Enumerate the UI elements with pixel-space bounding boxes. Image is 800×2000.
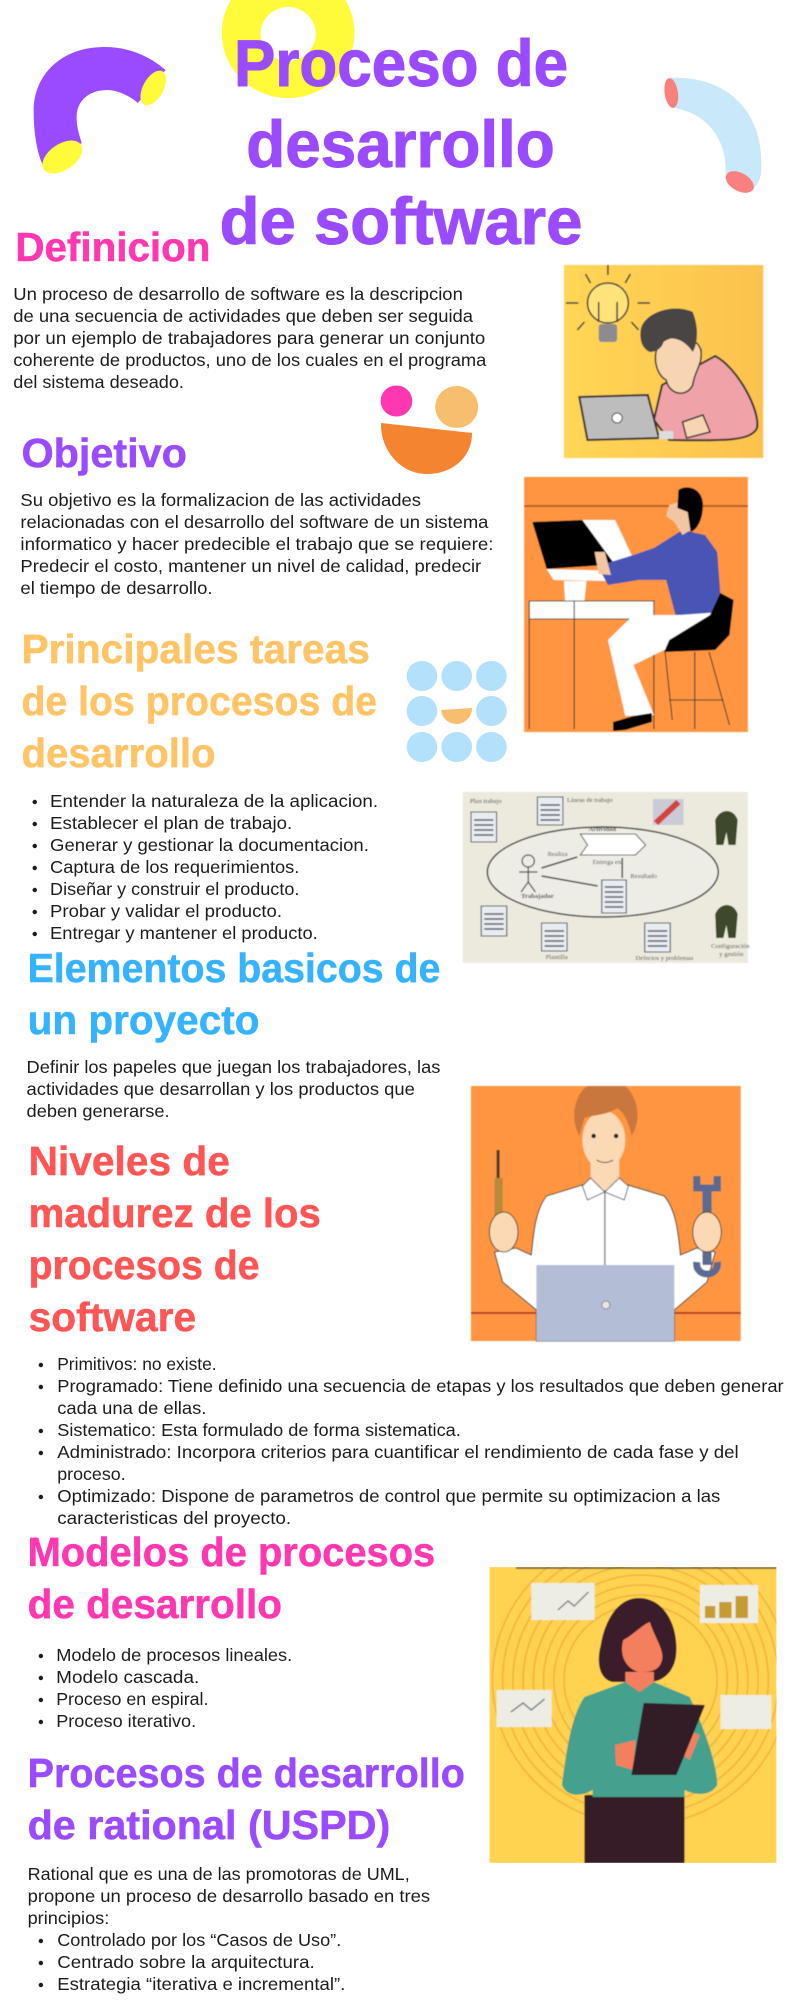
decoration: yellow ring xyxy=(222,0,355,98)
text block: definicion: de una secuencia de actividades que deben ser seguida xyxy=(13,306,474,326)
illustration: man at drafting desk xyxy=(524,477,748,732)
text block: elementos: actividades que desarrollan y los productos que xyxy=(27,1079,415,1099)
heading: Elementos basicos: un proyecto xyxy=(28,996,260,1043)
illustration: woman with tablet xyxy=(489,1567,776,1863)
list: niveles de madurez: caracteristicas del proyecto. xyxy=(57,1508,291,1528)
text block: objetivo xyxy=(20,490,493,598)
list: principales tareas: Generar y gestionar la documentacion. xyxy=(50,835,369,855)
title xyxy=(220,28,582,259)
heading: Modelos de procesos: Modelos de procesos xyxy=(28,1528,435,1575)
diagram: software process elements: Realiza xyxy=(548,851,568,858)
list: principales tareas: Entregar y mantener el producto. xyxy=(50,923,318,943)
diagram: software process elements: Actividad xyxy=(589,826,616,833)
heading: Niveles de madurez xyxy=(29,1137,321,1340)
list: modelos: Proceso en espiral. xyxy=(56,1689,208,1709)
list: principales tareas: Diseñar y construir el producto. xyxy=(50,879,299,899)
list: principales tareas: Captura de los requerimientos. xyxy=(50,857,299,877)
heading: Niveles de madurez: Niveles de xyxy=(29,1137,230,1184)
list: modelos: Proceso iterativo. xyxy=(56,1711,196,1731)
list: principales tareas xyxy=(32,791,378,943)
text block: rational xyxy=(28,1864,430,1928)
heading: Objetivo: Objetivo xyxy=(21,429,187,476)
text block: elementos: Definir los papeles que juegan los trabajadores, las xyxy=(27,1057,440,1077)
diagram: software process elements: Plantilla xyxy=(546,954,568,961)
heading: Elementos basicos xyxy=(28,944,440,1043)
heading: Elementos basicos: Elementos basicos de xyxy=(28,944,440,991)
heading: Niveles de madurez: madurez de los xyxy=(29,1189,321,1236)
list: principios xyxy=(39,1930,345,1994)
heading: Procesos de desarrollo de rational: de rational (USPD) xyxy=(28,1801,390,1848)
list: modelos xyxy=(39,1645,292,1731)
text block: rational: Rational que es una de las promotoras de UML, xyxy=(28,1864,410,1884)
list: niveles de madurez: cada una de ellas. xyxy=(57,1398,206,1418)
list: niveles de madurez: Programado: Tiene definido una secuencia de etapas y los resultados que deben generar xyxy=(57,1376,784,1396)
text block: objetivo: el tiempo de desarrollo. xyxy=(20,578,213,598)
text block: definicion: coherente de productos, uno de los cuales en el programa xyxy=(13,350,487,370)
diagram: software process elements: Entrega en xyxy=(593,859,622,866)
heading: Principales tareas: desarrollo xyxy=(21,729,216,776)
text block: objetivo: informatico y hacer predecible el trabajo que se requiere: xyxy=(20,534,493,554)
text block: elementos xyxy=(27,1057,440,1121)
list: modelos: Modelo cascada. xyxy=(56,1667,199,1687)
heading: Niveles de madurez: software xyxy=(29,1293,196,1340)
text block: definicion: del sistema deseado. xyxy=(13,372,184,392)
list: principios: Estrategia “iterativa e incremental”. xyxy=(57,1974,345,1994)
list: principales tareas: Entender la naturaleza de la aplicacion. xyxy=(50,791,378,811)
decoration: light blue arc xyxy=(663,77,761,197)
list: niveles de madurez: Primitivos: no existe. xyxy=(57,1354,217,1374)
text block: rational: principios: xyxy=(28,1908,109,1928)
list: principales tareas: Establecer el plan de trabajo. xyxy=(50,813,292,833)
heading: Modelos de procesos xyxy=(28,1528,435,1627)
diagram: software process elements: Trabajador xyxy=(521,893,554,900)
list: niveles de madurez: Sistematico: Esta formulado de forma sistematica. xyxy=(57,1420,461,1440)
title: de software xyxy=(220,186,582,259)
text block: objetivo: Predecir el costo, mantener un nivel de calidad, predecir xyxy=(20,556,481,576)
diagram: software process elements: Configuración xyxy=(711,943,750,950)
diagram: software process elements: Defectos y problemas xyxy=(636,955,694,962)
list: principios: Controlado por los “Casos de Uso”. xyxy=(57,1930,341,1950)
diagram: software process elements: y gestión xyxy=(719,951,744,958)
illustration: man with tools and laptop xyxy=(471,1086,741,1341)
diagram: software process elements xyxy=(463,792,750,963)
list: niveles de madurez xyxy=(39,1354,784,1528)
list: principios: Centrado sobre la arquitectura. xyxy=(57,1952,315,1972)
heading: Niveles de madurez: procesos de xyxy=(29,1241,260,1288)
illustration: person with idea and laptop xyxy=(564,265,763,458)
diagram: software process elements: Líneas de trabajo xyxy=(567,797,613,804)
heading: Principales tareas: Principales tareas xyxy=(21,625,370,672)
heading: Modelos de procesos: de desarrollo xyxy=(28,1580,282,1627)
decoration: blue dot grid xyxy=(407,661,507,762)
list: modelos: Modelo de procesos lineales. xyxy=(56,1645,292,1665)
diagram: software process elements: Resultado xyxy=(630,873,658,880)
decoration: pink and orange shapes xyxy=(381,386,478,474)
title: Proceso de xyxy=(234,28,568,101)
heading: Procesos de desarrollo de rational: Procesos de desarrollo xyxy=(28,1749,465,1796)
title: desarrollo xyxy=(246,109,555,182)
text block: definicion xyxy=(13,284,487,392)
text block: objetivo: Su objetivo es la formalizacion de las actividades xyxy=(20,490,421,510)
heading: Principales tareas: de los procesos de xyxy=(21,677,377,724)
diagram: software process elements: Plan trabajo xyxy=(470,798,503,805)
text block: definicion: Un proceso de desarrollo de software es la descripcion xyxy=(13,284,463,304)
text block: objetivo: relacionadas con el desarrollo del software de un sistema xyxy=(20,512,489,532)
list: niveles de madurez: proceso. xyxy=(57,1464,126,1484)
heading: Definicion: Definicion xyxy=(15,223,210,270)
text block: elementos: deben generarse. xyxy=(27,1101,170,1121)
list: niveles de madurez: Optimizado: Dispone de parametros de control que permite su optimizacion a las xyxy=(57,1486,720,1506)
decoration: purple arc xyxy=(34,47,171,180)
heading: Procesos de desarrollo de rational xyxy=(28,1749,465,1848)
heading: Principales tareas xyxy=(21,625,377,776)
text block: definicion: por un ejemplo de trabajadores para generar un conjunto xyxy=(13,328,485,348)
list: principales tareas: Probar y validar el producto. xyxy=(50,901,282,921)
list: niveles de madurez: Administrado: Incorpora criterios para cuantificar el rendimiento de cada fase y del xyxy=(57,1442,739,1462)
text block: rational: propone un proceso de desarrollo basado en tres xyxy=(28,1886,430,1906)
